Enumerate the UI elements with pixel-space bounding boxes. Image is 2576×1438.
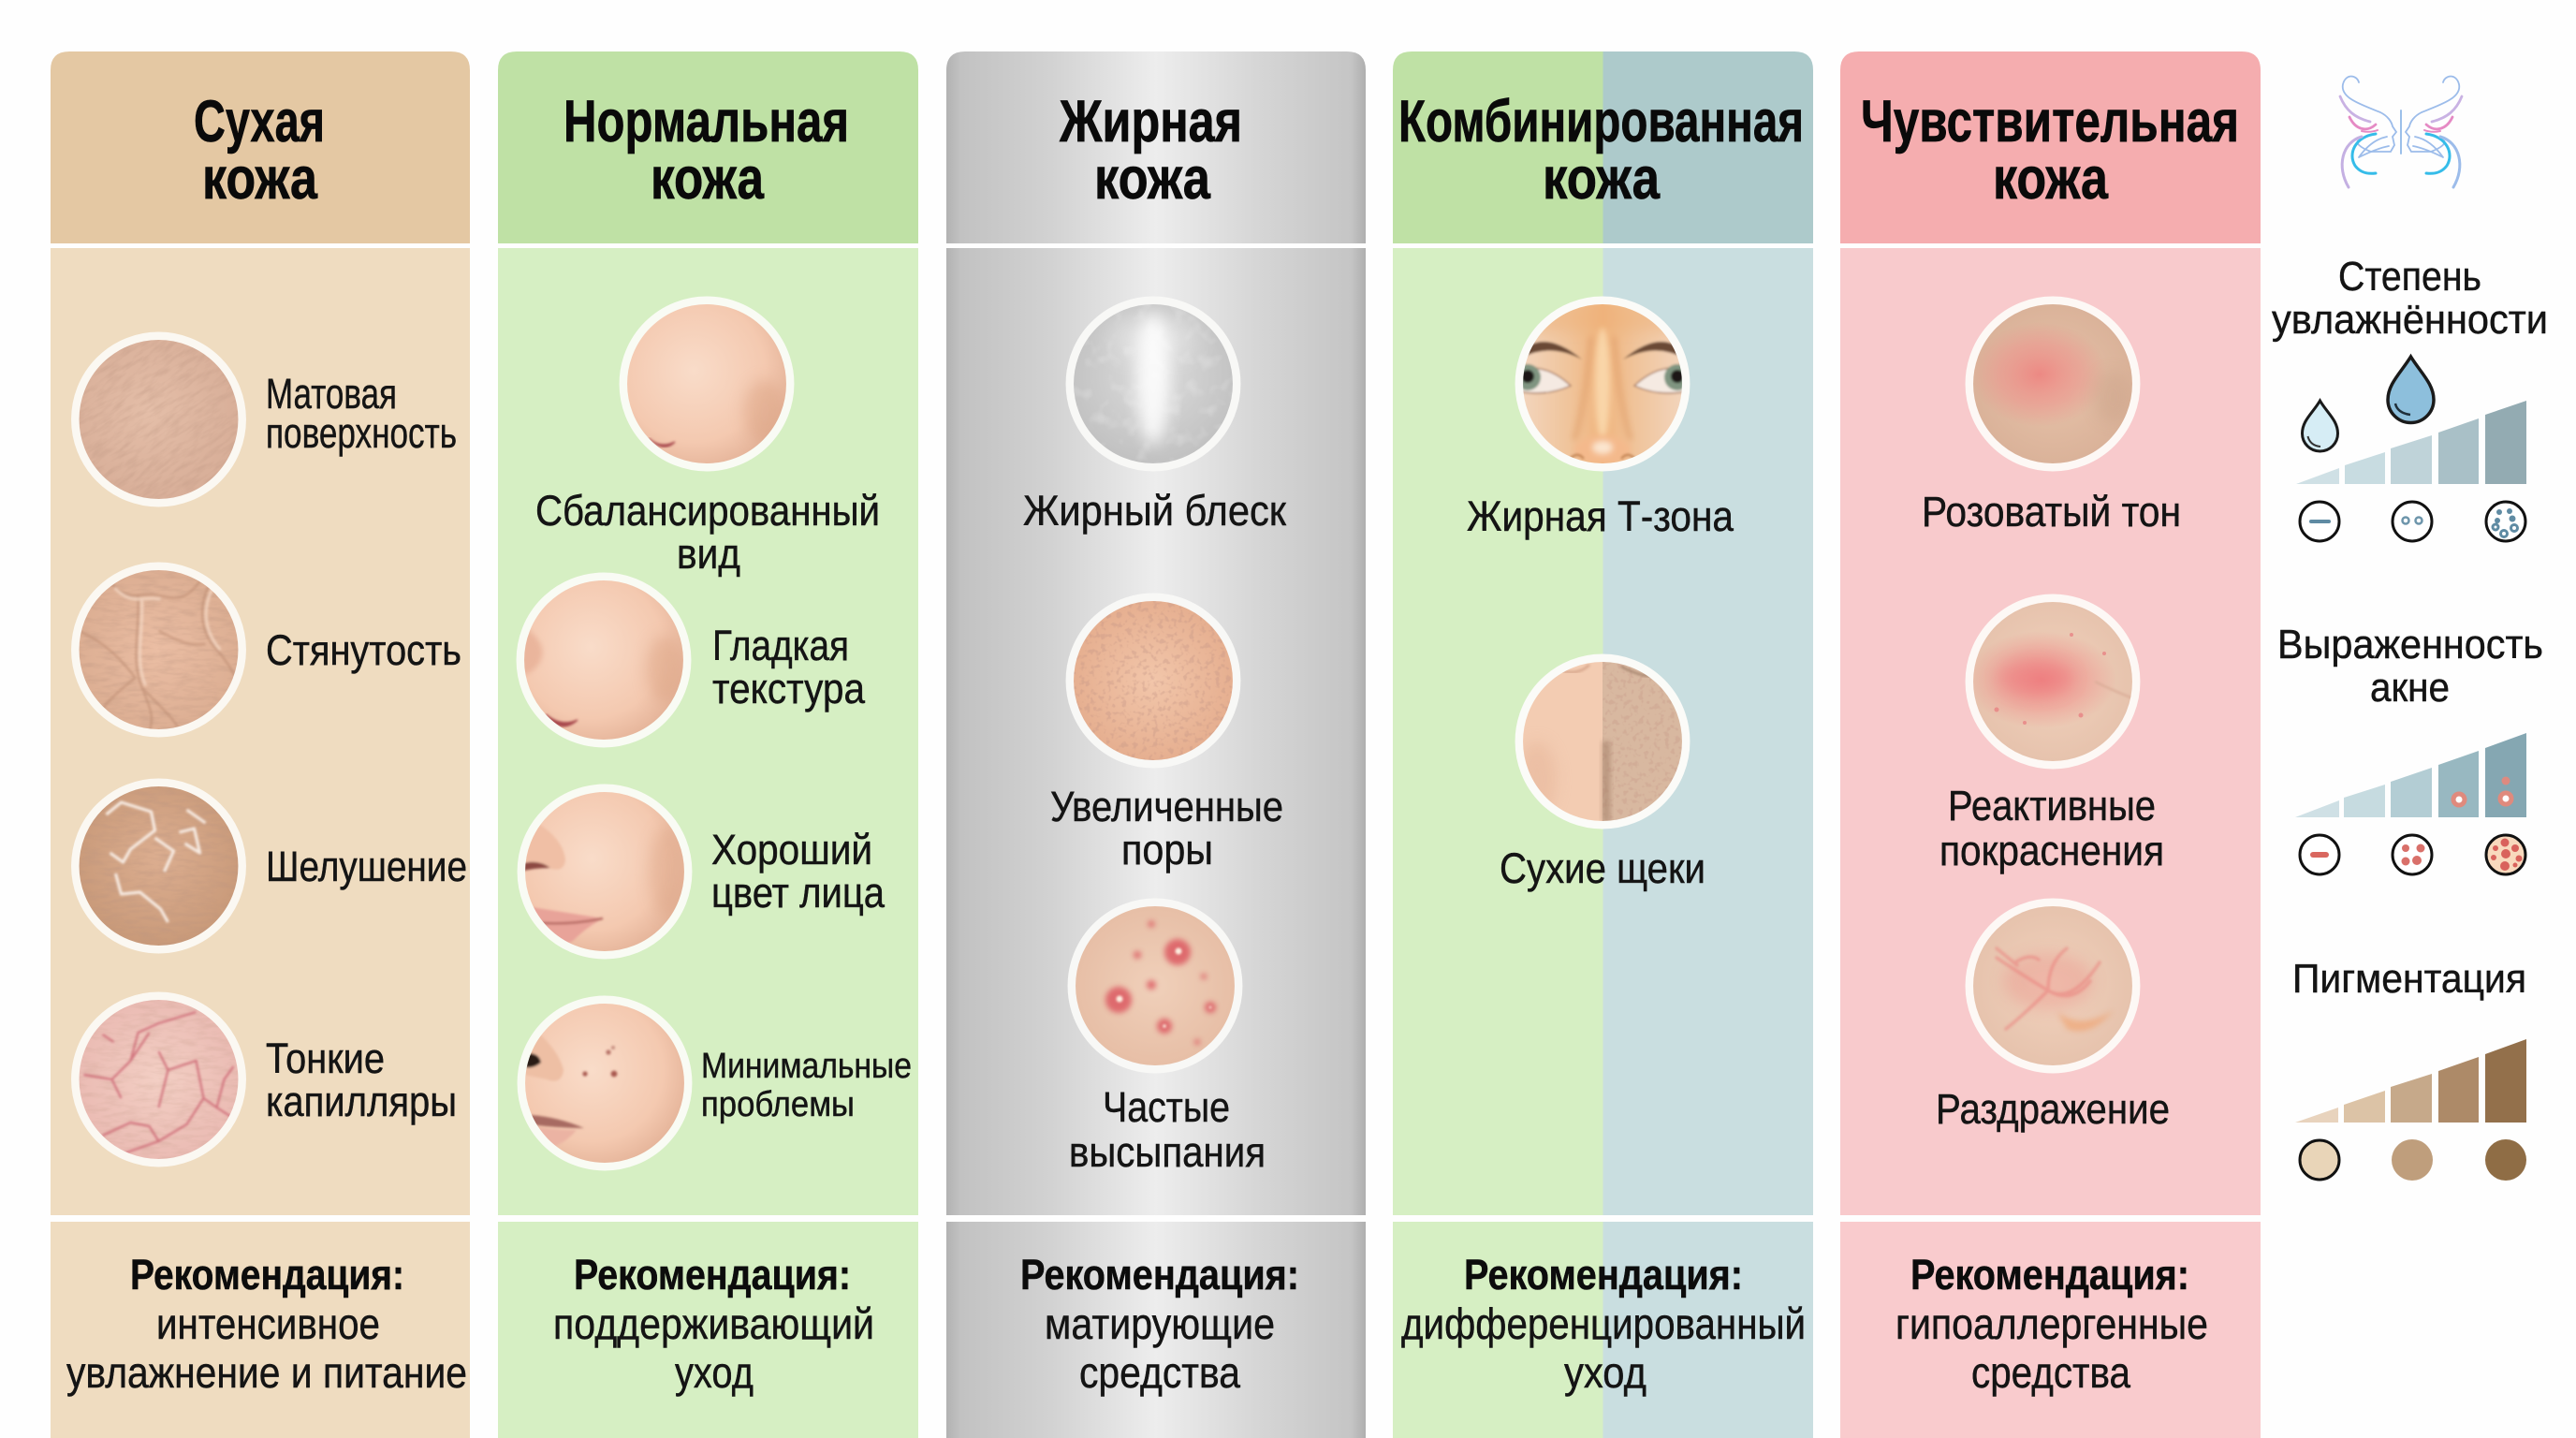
- recommendation: normal skin: Рекомендация:: [574, 1251, 851, 1299]
- legend heading: acne: [2277, 622, 2543, 711]
- recommendation: combination skin: дифференцированный: [1401, 1299, 1806, 1348]
- body background: combination skin: [1393, 248, 1813, 1215]
- feature: tightness: [75, 566, 461, 734]
- feature: frequent breakouts: [1069, 902, 1266, 1176]
- feature: smooth texture: [520, 577, 866, 743]
- legend: hydration level: [2272, 254, 2548, 541]
- recommendation: dry skin: увлажнение и питание: [66, 1348, 467, 1397]
- feature: reactive redness: Реактивные: [1948, 782, 2156, 829]
- recommendation: combination skin: [1393, 1222, 1813, 1438]
- feature: fine capillaries: [75, 996, 457, 1163]
- scale bars: acne: [2295, 733, 2526, 817]
- recommendation: sensitive skin: средства: [1971, 1348, 2130, 1397]
- panel: combination skin column: [1393, 51, 1813, 1438]
- legend: acne severity: [2277, 622, 2543, 874]
- feature: good complexion: Хороший: [711, 826, 872, 873]
- feature: balanced look: [535, 301, 880, 578]
- scale bars: hydration: [2296, 401, 2526, 484]
- logo: butterfly faces: [2340, 77, 2462, 187]
- feature: frequent breakouts: высыпания: [1069, 1128, 1266, 1176]
- recommendation: sensitive skin: Рекомендация:: [1910, 1251, 2189, 1299]
- recommendation: dry skin: интенсивное: [156, 1299, 380, 1348]
- feature: frequent breakouts: Частые: [1103, 1083, 1230, 1131]
- recommendation: dry skin: [51, 1222, 470, 1438]
- legend heading: hydration: увлажнённости: [2272, 297, 2548, 343]
- feature: oily T-zone: [1467, 300, 1734, 540]
- legend heading: acne: акне: [2370, 665, 2450, 711]
- feature: good complexion: цвет лица: [711, 869, 886, 917]
- feature: tightness: Стянутость: [266, 626, 461, 674]
- feature: minimal concerns: проблемы: [701, 1085, 855, 1124]
- recommendation: oily skin: Рекомендация:: [1020, 1251, 1299, 1299]
- body background: sensitive skin: [1840, 248, 2261, 1215]
- recommendation: oily skin: [946, 1222, 1366, 1438]
- feature: minimal concerns: Минимальные: [701, 1047, 912, 1086]
- header: combination skin: кожа: [1543, 146, 1661, 212]
- feature: fine capillaries: Тонкие: [266, 1034, 385, 1082]
- feature: flaking: Шелушение: [266, 843, 467, 890]
- header: normal skin: [498, 51, 918, 243]
- feature: oily shine: Жирный блеск: [1023, 487, 1286, 535]
- body background: oily skin: [946, 248, 1366, 1215]
- panel: dry skin column: [51, 51, 470, 1438]
- feature: irritation: Раздражение: [1936, 1085, 2170, 1133]
- body background: dry skin: [51, 248, 470, 1215]
- feature: fine capillaries: капилляры: [266, 1078, 457, 1125]
- recommendation: combination skin: уход: [1564, 1348, 1647, 1397]
- legend heading: hydration: Степень: [2338, 254, 2481, 300]
- panel: sensitive skin column: [1840, 51, 2261, 1438]
- header: oily skin: Жирная: [1059, 89, 1242, 154]
- feature: oily shine: [1023, 301, 1286, 535]
- header: dry skin: [51, 51, 470, 243]
- panel: oily skin column: [946, 51, 1366, 1438]
- feature: good complexion: [520, 788, 886, 955]
- feature: enlarged pores: Увеличенные: [1050, 783, 1283, 830]
- recommendation: combination skin: Рекомендация:: [1464, 1251, 1743, 1299]
- feature: smooth texture: Гладкая: [712, 622, 849, 669]
- feature: pinkish tone: Розоватый тон: [1922, 488, 2181, 536]
- recommendation: oily skin: матирующие: [1045, 1299, 1275, 1348]
- header: dry skin: Сухая: [194, 89, 325, 154]
- recommendation: oily skin: средства: [1079, 1348, 1240, 1397]
- legend heading: hydration: [2272, 254, 2548, 343]
- header: sensitive skin: кожа: [1993, 146, 2109, 212]
- recommendation: sensitive skin: гипоаллергенные: [1895, 1299, 2208, 1348]
- feature: dry cheeks: [1500, 658, 1705, 892]
- feature: enlarged pores: поры: [1121, 826, 1213, 873]
- icon: small water drop: [2303, 401, 2338, 451]
- feature: reactive redness: покраснения: [1939, 827, 2164, 874]
- feature: matte surface: [71, 331, 456, 507]
- header: normal skin: кожа: [651, 146, 765, 212]
- header: normal skin: Нормальная: [564, 89, 849, 154]
- recommendation: normal skin: поддерживающий: [553, 1299, 874, 1348]
- feature: pinkish tone: [1922, 301, 2181, 536]
- icons: hydration levels: [2300, 502, 2525, 541]
- recommendation: sensitive skin: [1840, 1222, 2261, 1438]
- recommendation: normal skin: [498, 1222, 918, 1438]
- body background: normal skin: [498, 248, 918, 1215]
- icons: acne levels: [2300, 835, 2525, 874]
- header: dry skin: кожа: [202, 146, 318, 212]
- scale bars: pigmentation: [2295, 1039, 2526, 1123]
- feature: irritation: [1936, 902, 2170, 1133]
- feature: matte surface: поверхность: [266, 409, 457, 457]
- feature: flaking: [75, 783, 467, 949]
- legend: pigmentation: [2292, 956, 2526, 1181]
- header: sensitive skin: Чувствительная: [1861, 89, 2239, 154]
- recommendation: normal skin: уход: [675, 1348, 754, 1397]
- icon: large water drop: [2388, 357, 2434, 423]
- panel: normal skin column: [498, 51, 918, 1438]
- feature: balanced look: Сбалансированный: [535, 487, 880, 535]
- feature: oily T-zone: Жирная Т-зона: [1467, 492, 1734, 540]
- feature: reactive redness: [1939, 598, 2164, 874]
- header: oily skin: кожа: [1094, 146, 1211, 212]
- feature: dry cheeks: Сухие щеки: [1500, 844, 1705, 892]
- feature: enlarged pores: [1050, 597, 1283, 873]
- feature: balanced look: вид: [677, 530, 740, 578]
- header: combination skin: [1393, 51, 1813, 243]
- header: oily skin: [946, 51, 1366, 243]
- recommendation: dry skin: Рекомендация:: [130, 1251, 404, 1299]
- feature: minimal concerns: [520, 1000, 912, 1167]
- legend heading: acne: Выраженность: [2277, 622, 2543, 668]
- header: sensitive skin: [1840, 51, 2261, 243]
- header: combination skin: Комбинированная: [1398, 89, 1804, 154]
- icons: pigmentation levels: [2300, 1139, 2526, 1181]
- feature: matte surface: Матовая: [266, 370, 397, 418]
- legend heading: pigmentation: Пигментация: [2292, 956, 2526, 1002]
- feature: smooth texture: текстура: [712, 665, 866, 712]
